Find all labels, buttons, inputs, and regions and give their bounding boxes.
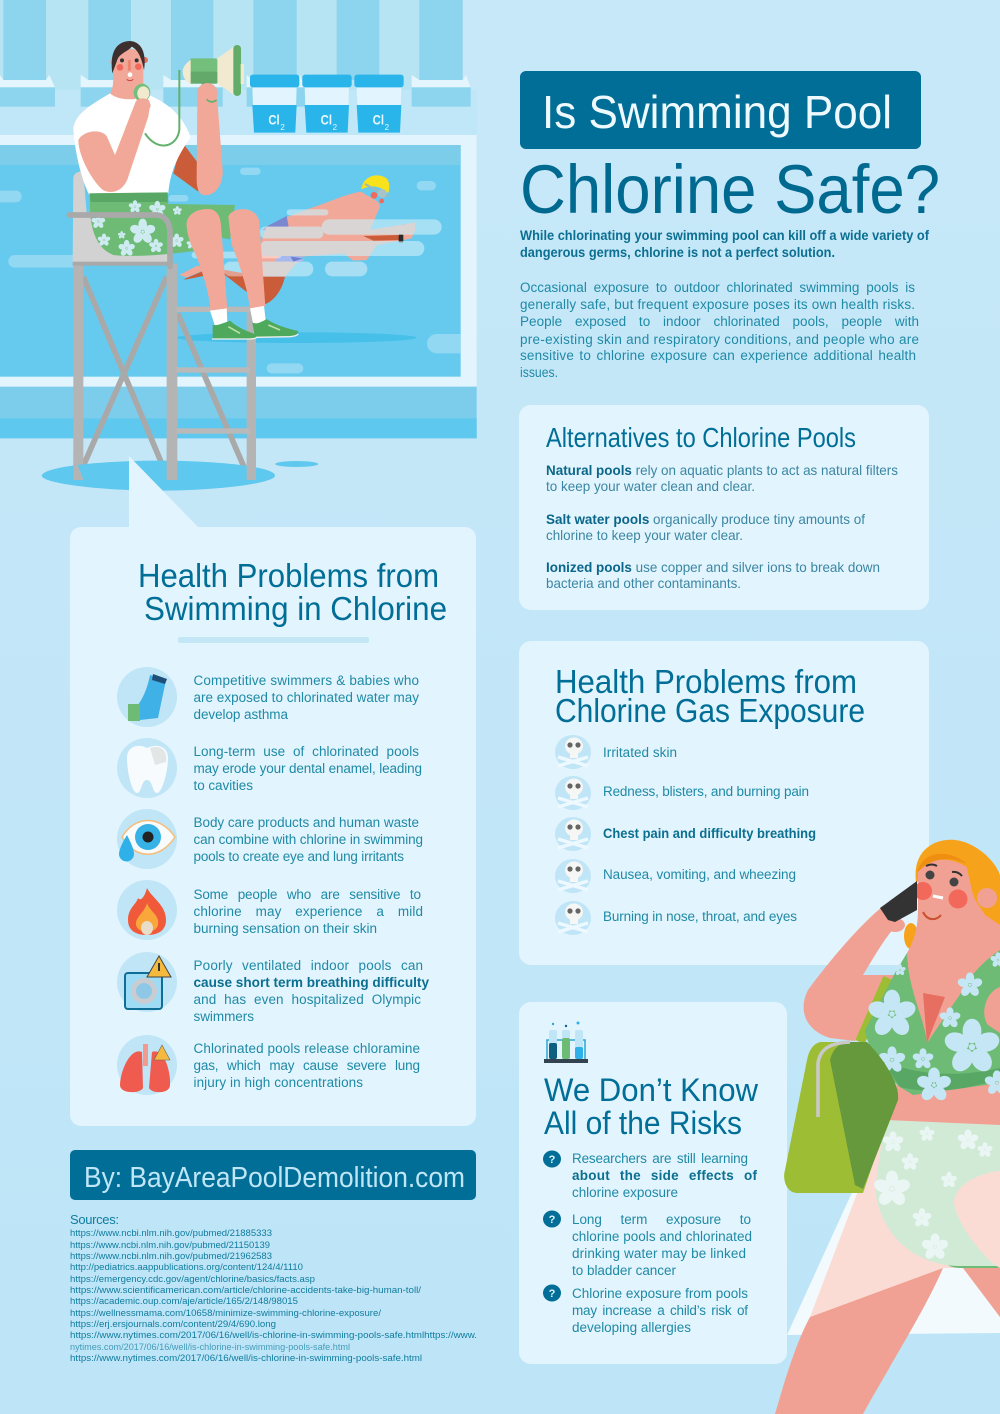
text: chloramine gas: gas, which may cause severe lung: [194, 1058, 420, 1073]
symptom list: Chest pain and difficulty breathing: [603, 826, 816, 841]
bikini top: [865, 950, 1000, 1103]
sources: https://www.scientificamerican.com/article/chlorine-accidents-take-big-human-toll/: [70, 1285, 422, 1295]
risk: bladder cancer: Long term exposure to: [572, 1212, 751, 1227]
face: [914, 854, 997, 919]
lifeguard chair: [73, 171, 256, 480]
credit banner: [70, 1150, 476, 1200]
chlorine buckets: 2: [280, 123, 285, 132]
phone: [880, 881, 917, 922]
heading: Health Problems from: [555, 663, 857, 700]
text: burning skin: burning sensation on their skin: [194, 921, 377, 936]
text: asthma: [194, 673, 419, 722]
symptom list: Irritated skin: [603, 745, 677, 760]
title banner: [520, 71, 921, 149]
hair: [904, 840, 1000, 949]
body paragraph: issues.: [520, 365, 558, 380]
natural pools: [546, 462, 898, 494]
head and torso skin: [885, 860, 1000, 1125]
text: breathing difficulty: swimmers: [194, 1009, 254, 1024]
sarong: [787, 1120, 1000, 1335]
ionized pools: Ionized pools use copper and silver ions to break down: [546, 559, 880, 575]
shoulder bag: [784, 1042, 898, 1193]
text: burning skin: [194, 887, 423, 936]
icon: flame: [117, 880, 177, 940]
icon: tooth: [117, 738, 177, 798]
text: irritants: Body care products and human waste: [194, 815, 419, 830]
chlorine buckets: Cl: [268, 112, 280, 128]
speech bubble pointer: [129, 456, 199, 528]
risk: side effects: ?: [549, 1154, 556, 1166]
sources: https://www.nytimes.com/2017/06/16/well/is-chlorine-in-swimming-pools-safe.html: [70, 1353, 422, 1363]
heading: Swimming in Chlorine: [144, 590, 447, 627]
body paragraph: Occasional exposure to outdoor chlorinated swimming pools is: [520, 280, 915, 295]
text: burning skin: chlorine may experience a mild: [194, 904, 423, 919]
sources: https://www.ncbi.nlm.nih.gov/pubmed/21962583: [70, 1251, 272, 1261]
chlorine buckets: 2: [333, 123, 338, 132]
body paragraph: sensitive to chlorine exposure can experience additional health: [520, 348, 916, 363]
text: enamel: [194, 744, 422, 793]
raised arm: [804, 907, 895, 1041]
icon: test tubes: [544, 1022, 588, 1063]
text: chloramine gas: injury in high concentrations: [194, 1075, 363, 1090]
chair shadow on floor: [42, 447, 318, 491]
sarong over legs: [810, 1120, 1000, 1317]
panel: unknown risks: [519, 1002, 787, 1364]
heading: Chlorine Gas Exposure: [555, 692, 865, 729]
sources: https://www.ncbi.nlm.nih.gov/pubmed/21885333: [70, 1228, 272, 1238]
intro text: While chlorinating your swimming pool can kill off a wide variety of: [520, 228, 929, 243]
body paragraph: People exposed to indoor chlorinated pools, people with: [520, 314, 919, 329]
body paragraph: [520, 280, 919, 380]
water streaks across swimmer: [192, 209, 442, 276]
sources: https://www.nytimes.com/2017/06/16/well/is-chlorine-in-swimming-pools-safe.htmlhttps://www.: [70, 1330, 477, 1340]
risk: allergies: [543, 1284, 748, 1335]
sources: https://emergency.cdc.gov/agent/chlorine/basics/facts.asp: [70, 1274, 315, 1284]
intro text: dangerous germs, chlorine is not a perfect solution.: [520, 245, 835, 260]
text: breathing difficulty: Poorly ventilated indoor pools can: [194, 958, 423, 973]
symptom list: Burning in nose, throat, and eyes: [603, 909, 797, 924]
risk: bladder cancer: [543, 1210, 752, 1278]
text: breathing difficulty: and has even hospitalized Olympic: [194, 992, 421, 1007]
heading: Alternatives to Chlorine Pools: [546, 422, 856, 453]
swimming pool water: [0, 135, 477, 438]
risk: side effects: about the side effects of: [572, 1168, 758, 1183]
sources: nytimes.com/2017/06/16/well/is-chlorine-in-swimming-pools-safe.html: [70, 1342, 350, 1352]
text: enamel: may erode your dental enamel, leading: [194, 761, 422, 776]
panel: alternatives to chlorine pools: [519, 405, 929, 610]
text: enamel: Long-term use of chlorinated pools: [194, 744, 419, 759]
title banner: Is Swimming Pool: [542, 86, 892, 138]
sources: http://pediatrics.aappublications.org/content/124/4/1110: [70, 1262, 303, 1272]
natural pools: Natural pools rely on aquatic plants to act as natural filters: [546, 462, 898, 478]
text: enamel: to cavities: [194, 778, 253, 793]
icon: teary eye: [117, 809, 177, 869]
heading: All of the Risks: [544, 1105, 742, 1141]
title: Chlorine Safe?: [520, 151, 940, 228]
panel: chlorine gas exposure: [519, 641, 929, 965]
bag strap: [860, 978, 888, 1042]
sources: https://www.ncbi.nlm.nih.gov/pubmed/21150139: [70, 1240, 270, 1250]
chlorine buckets: [250, 75, 404, 133]
icon: lungs: [117, 1035, 177, 1095]
swimmer: [179, 175, 415, 305]
text: irritants: can combine with chlorine in swimming: [194, 832, 423, 847]
symptom list: Redness, blisters, and burning pain: [603, 784, 809, 799]
text: breathing difficulty: cause short term breathing difficulty: [194, 975, 429, 990]
salt water pools: chlorine to keep your water clear.: [546, 527, 743, 543]
sources: https://academic.oup.com/aje/article/165/2/148/98015: [70, 1296, 298, 1306]
illustration: pool scene with lifeguard and swimmer: [0, 0, 477, 491]
risk: allergies: ?: [549, 1288, 556, 1300]
near leg: [775, 1268, 943, 1414]
symptom list: [603, 745, 816, 924]
text: breathing difficulty: [194, 958, 429, 1024]
lifeguard: [73, 41, 298, 339]
risk: allergies: developing allergies: [572, 1320, 691, 1335]
chlorine buckets: Cl: [373, 112, 384, 128]
text: burning skin: Some people who are sensitive to: [194, 887, 421, 902]
sources: https://erj.ersjournals.com/content/29/4/690.long: [70, 1319, 276, 1329]
symptom list: Nausea, vomiting, and wheezing: [603, 867, 796, 882]
credit banner: By: BayAreaPoolDemolition.com: [84, 1162, 465, 1194]
chlorine buckets: Cl: [321, 112, 332, 128]
panel: health problems from swimming: [70, 456, 476, 1126]
text: irritants: [194, 815, 423, 864]
icon: ventilation warning: [117, 952, 177, 1012]
heading: [138, 557, 447, 627]
risk: bladder cancer: chlorine pools and chlorinated: [572, 1229, 752, 1244]
risk: bladder cancer: ?: [549, 1214, 556, 1226]
risk: side effects: [543, 1150, 758, 1200]
ionized pools: [546, 559, 880, 591]
pool hall back wall: [0, 0, 477, 135]
heading: We Don’t Know: [544, 1072, 759, 1108]
icon: asthma inhaler: [117, 667, 177, 727]
text: irritants: pools to create eye and lung irritants: [194, 849, 404, 864]
salt water pools: [546, 511, 865, 543]
megaphone: [134, 45, 244, 146]
risk: bladder cancer: to bladder cancer: [572, 1263, 676, 1278]
text: asthma: develop asthma: [194, 707, 288, 722]
risk: allergies: may increase a child’s risk of: [572, 1303, 748, 1318]
risk: side effects: chlorine exposure: [572, 1185, 678, 1200]
far leg: [963, 1268, 1000, 1317]
illustration: woman on phone: [775, 840, 1000, 1414]
intro text: [520, 228, 929, 260]
natural pools: to keep your water clean and clear.: [546, 478, 755, 494]
heading: [555, 663, 865, 729]
body paragraph: generally safe, but frequent exposure poses its own health risks.: [520, 297, 915, 312]
chlorine buckets: 2: [385, 123, 390, 132]
body paragraph: pre-existing skin and respiratory conditions, and people who are: [520, 332, 919, 347]
text: chloramine gas: Chlorinated pools release chloramine: [194, 1041, 420, 1056]
hand: [885, 918, 905, 932]
heading: [544, 1072, 759, 1141]
salt water pools: Salt water pools organically produce tiny amounts of: [546, 511, 865, 527]
heading: Health Problems from: [138, 557, 439, 594]
ionized pools: bacteria and other contaminants.: [546, 575, 741, 591]
risk: bladder cancer: drinking water may be linked: [572, 1246, 746, 1261]
text: asthma: Competitive swimmers & babies who: [194, 673, 419, 688]
skull icons: [555, 735, 591, 935]
sources: [70, 1212, 477, 1363]
text: chloramine gas: [194, 1041, 420, 1090]
sources: https://wellnessmama.com/10658/minimize-swimming-chlorine-exposure/: [70, 1308, 382, 1318]
chair armrest: [69, 215, 170, 267]
text: asthma: are exposed to chlorinated water may: [194, 690, 419, 705]
lifeguard shorts: [89, 192, 235, 257]
risk: side effects: Researchers are still learning: [572, 1151, 748, 1166]
sources: Sources:: [70, 1212, 119, 1227]
bikini bottom: [872, 1120, 1000, 1268]
risk: allergies: Chlorine exposure from pools: [572, 1286, 748, 1301]
